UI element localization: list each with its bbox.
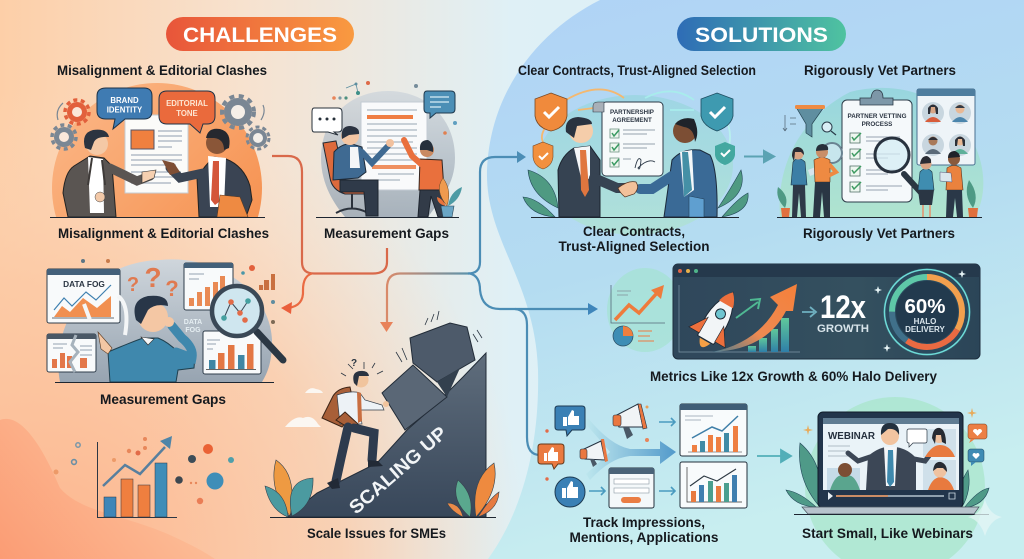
person: right handshaker <box>640 118 717 217</box>
presenter <box>848 423 932 490</box>
arrow: tracking to webinars <box>757 450 791 462</box>
plants <box>523 170 748 217</box>
arrow: to metrics <box>588 303 598 315</box>
connector: challenges network <box>272 156 470 323</box>
icon: thumbs up blue <box>555 406 585 436</box>
plants pots <box>777 180 978 217</box>
heading: clear contracts top: Clear Contracts, Trust-Aligned Selection <box>518 63 756 78</box>
icon: megaphone upper <box>613 404 647 439</box>
screen content: WEBINAR <box>828 431 876 442</box>
laptop screen <box>818 412 963 508</box>
stat: 60 percent ring: 60% <box>904 295 946 318</box>
person: confused man <box>98 296 195 382</box>
arrowhead: to scale issues <box>380 322 393 332</box>
icon: thumbs up orange <box>538 444 564 469</box>
clipboard: PROCESS <box>862 121 892 128</box>
icon: funnel <box>783 105 836 137</box>
solutions pill <box>677 17 846 51</box>
laptop base <box>802 507 979 514</box>
icon: gears <box>52 96 269 149</box>
small green arrow <box>736 299 760 318</box>
stat: 12x: GROWTH <box>817 323 869 335</box>
person: right colleague <box>162 129 252 217</box>
chart panel bottom right <box>203 331 261 374</box>
stat: 12x <box>817 289 869 335</box>
arrow: to contracts <box>517 151 526 163</box>
attendee <box>830 475 860 490</box>
small arrows <box>589 418 675 495</box>
person: left handshaker <box>558 117 625 217</box>
label: misalignment: Misalignment & Editorial Clashes <box>58 226 269 241</box>
clouds <box>285 388 323 427</box>
handshake <box>618 182 638 197</box>
window dots <box>678 269 698 273</box>
bars <box>748 318 789 352</box>
scene: misalignment <box>50 83 270 218</box>
data fog chart panel: DATA FOG <box>63 279 105 289</box>
agreement document <box>593 102 663 176</box>
dashboard <box>673 264 980 359</box>
plant <box>437 178 462 217</box>
agreement document: AGREEMENT <box>612 117 652 124</box>
icon: question marks: ? <box>165 276 179 301</box>
mountain <box>287 353 486 517</box>
sparkles <box>803 408 977 435</box>
bubble: brand identity <box>97 88 152 129</box>
label: clear contracts: Trust-Aligned Selection <box>558 239 710 254</box>
stat: 60 percent ring: DELIVERY <box>905 325 946 334</box>
icon: teal shield small <box>715 142 735 165</box>
scene: webinar <box>786 397 1002 559</box>
clipboard <box>842 90 912 202</box>
label: start small: Start Small, Like Webinars <box>802 526 973 541</box>
label: clear contracts: Clear Contracts, <box>583 224 685 239</box>
form panel <box>609 468 654 508</box>
icon: heart bubble blue <box>968 449 984 466</box>
plants <box>786 443 989 508</box>
challenges pill: CHALLENGES <box>183 24 337 47</box>
challenges pill <box>166 17 354 51</box>
dots <box>545 406 649 481</box>
document board <box>361 102 427 190</box>
boulder upper <box>410 323 475 382</box>
plant right <box>447 463 499 517</box>
icon: magnifier small <box>820 143 842 172</box>
bubble: brand identity: BRAND <box>110 96 139 105</box>
avatars panel <box>917 89 975 165</box>
icon: magnifier <box>212 286 283 360</box>
text: data fog faint: FOG <box>185 327 201 334</box>
chart: rising bars decorative <box>98 436 177 518</box>
clipboard: PARTNER VETTING <box>847 113 907 120</box>
icon: heart bubble orange <box>968 424 987 443</box>
icon: rocket <box>683 282 751 357</box>
decorative data dots <box>54 437 234 504</box>
data fog chart panel <box>47 269 126 335</box>
scene: measurement gaps top <box>312 81 462 218</box>
icon: orange shield small <box>533 142 553 169</box>
stat: 60 percent ring: HALO <box>914 317 936 326</box>
boulder shadow <box>437 368 460 397</box>
agreement document: PARTNERSHIP <box>610 109 654 116</box>
speech bubble <box>907 429 927 447</box>
arrowhead: to measurement gaps <box>281 302 292 314</box>
icon: question marks <box>127 262 179 301</box>
attendee <box>925 445 955 457</box>
bubble: editorial tone: TONE <box>176 109 198 118</box>
label: measurement gaps lower: Measurement Gaps <box>100 392 226 407</box>
person: left colleague <box>63 130 156 217</box>
label: measurement gaps top: Measurement Gaps <box>324 226 449 241</box>
person: climber <box>322 358 389 489</box>
scene: clear contracts <box>523 89 748 235</box>
axes <box>679 285 800 352</box>
chart panel: upper <box>680 404 747 456</box>
connector: solutions network <box>468 157 590 455</box>
icon: magnifier large <box>875 138 925 197</box>
icon: teal shield large <box>701 93 733 131</box>
icon: orange shield large <box>535 93 567 131</box>
arcs <box>542 89 730 165</box>
text: data fog faint: DATA <box>184 319 202 326</box>
icon: megaphone lower <box>580 439 608 467</box>
label: track impressions: Track Impressions, <box>583 515 705 530</box>
label: metrics: Metrics Like 12x Growth & 60% Halo Delivery <box>650 369 937 384</box>
label on rock: SCALING UP <box>345 423 452 519</box>
scene: scaling up <box>265 311 499 519</box>
label: vet partners: Rigorously Vet Partners <box>803 226 955 241</box>
attendee <box>928 477 954 490</box>
player bar <box>828 492 955 500</box>
label: clear contracts <box>558 224 710 254</box>
star glow <box>968 500 1002 536</box>
arrow to 12x <box>802 307 816 317</box>
person: man at board <box>404 140 446 217</box>
sparkles <box>874 270 966 352</box>
broken chart panel <box>47 334 96 372</box>
growth arrow <box>712 284 797 352</box>
chart: small metrics icon <box>607 268 683 352</box>
icon: thumbs up circle <box>555 477 585 507</box>
bubble: brand identity: IDENTITY <box>107 106 143 114</box>
solutions pill: SOLUTIONS <box>695 24 828 47</box>
label: track impressions <box>570 515 718 545</box>
plant left <box>265 460 313 517</box>
decorative dots <box>81 259 275 324</box>
icon: question marks: ? <box>127 274 139 296</box>
stat: 12x: 12x <box>820 289 866 325</box>
scene: vet partners <box>777 88 983 218</box>
boulder lower <box>382 365 447 430</box>
heading: misalignment top: Misalignment & Editorial Clashes <box>57 63 267 78</box>
document <box>125 115 188 193</box>
icon: question marks: ? <box>144 262 162 293</box>
heading: rigorously vet top: Rigorously Vet Partners <box>804 63 956 78</box>
bubble: text lines <box>424 91 455 118</box>
person: climber: ? <box>351 358 357 369</box>
label: scale issues: Scale Issues for SMEs <box>307 526 446 541</box>
chart panel top right <box>184 263 233 310</box>
bubble: typing dots <box>312 108 342 135</box>
decorative dots <box>332 81 457 135</box>
screen content <box>823 418 959 490</box>
scene: data fog <box>47 259 283 383</box>
motion marks <box>396 311 482 362</box>
flow arrow <box>584 418 676 480</box>
people left <box>791 144 836 217</box>
people right <box>918 151 963 217</box>
label: track impressions: Mentions, Applications <box>570 530 718 545</box>
arrow: contracts to vetting <box>744 151 774 162</box>
person: seated man with chair <box>323 126 394 216</box>
chart panel: lower <box>680 462 747 508</box>
stat: 60 percent ring <box>883 268 971 356</box>
bubble: editorial tone <box>159 91 215 133</box>
small bars <box>259 274 275 290</box>
bubble: editorial tone: EDITORIAL <box>166 99 208 108</box>
text: data fog faint <box>184 319 202 334</box>
